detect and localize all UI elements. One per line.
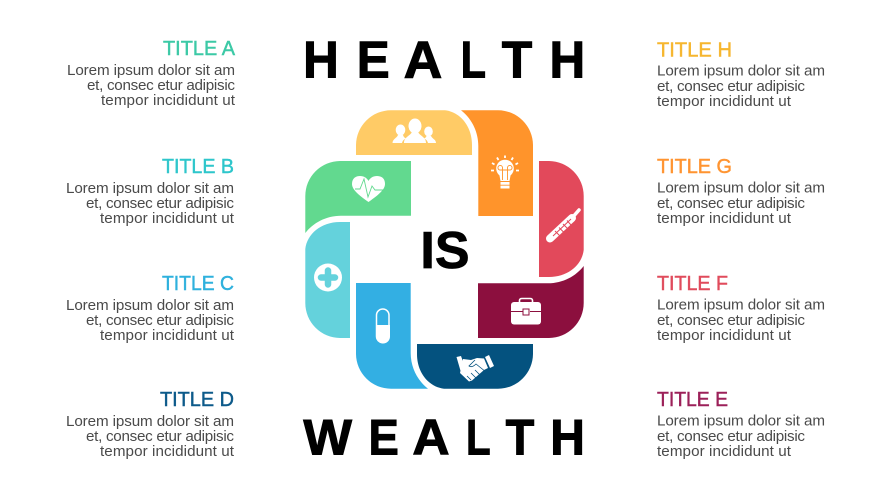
text block: Title A: tempor incididunt ut — [101, 92, 236, 109]
text block: Title E — [657, 388, 825, 460]
text block: Title E: et, consec etur adipisic — [657, 428, 805, 445]
heading: WEALTH: T — [506, 410, 535, 466]
heading: WEALTH: H — [550, 409, 585, 466]
text block: Title G: Lorem ipsum dolor sit am — [657, 180, 825, 196]
segment: green — [305, 161, 411, 233]
text block: Title G: et, consec etur adipisic — [657, 195, 805, 212]
segment: maroon — [478, 266, 584, 338]
segment: blue — [356, 283, 428, 389]
segment: yellow — [356, 110, 472, 155]
text block: Title D: et, consec etur adipisic — [86, 428, 234, 445]
text block: Title B: TITLE B — [162, 155, 234, 178]
icon: thermometer — [550, 210, 579, 238]
heading: WEALTH: E — [369, 410, 399, 466]
text block: Title C: tempor incididunt ut — [100, 327, 235, 344]
text block: Title B: et, consec etur adipisic — [86, 195, 234, 212]
text block: Title C: TITLE C — [162, 272, 234, 295]
text block: Title C: Lorem ipsum dolor sit am — [66, 297, 234, 314]
text block: Title A — [67, 37, 236, 109]
icon: capsule — [376, 309, 390, 344]
segment: dark blue — [417, 344, 533, 389]
text block: Title E: tempor incididunt ut — [657, 443, 792, 460]
segment: red — [539, 161, 584, 277]
text block: Title E: TITLE E — [657, 388, 728, 411]
text block: Title H: tempor incididunt ut — [657, 93, 792, 110]
text block: Title G: TITLE G — [657, 155, 732, 178]
center word: IS: IS — [420, 222, 470, 280]
heading: HEALTH: E — [357, 30, 390, 89]
text block: Title F — [657, 272, 825, 344]
text block: Title A: Lorem ipsum dolor sit am — [67, 62, 235, 79]
icon: handshake — [456, 355, 494, 382]
text block: Title B — [66, 155, 235, 227]
heading: WEALTH: W — [303, 409, 353, 465]
text block: Title F: TITLE F — [657, 272, 728, 295]
heading: WEALTH — [303, 409, 585, 466]
heading: HEALTH: A — [404, 31, 442, 89]
text block: Title D: tempor incididunt ut — [100, 443, 235, 460]
segment: teal — [305, 222, 350, 338]
text block: Title B: Lorem ipsum dolor sit am — [66, 180, 234, 197]
icon: medical plus — [314, 264, 342, 292]
heading: WEALTH: L — [466, 409, 491, 466]
icon: heart with pulse — [352, 176, 385, 202]
heading: HEALTH: L — [461, 30, 486, 89]
text block: Title A: et, consec etur adipisic — [87, 77, 235, 94]
heading: HEALTH: H — [303, 30, 339, 89]
heading: HEALTH — [303, 30, 585, 89]
text block: Title H: TITLE H — [657, 38, 732, 62]
segment: orange — [461, 110, 533, 216]
heading: HEALTH: H — [549, 30, 585, 89]
text block: Title D: TITLE D — [160, 388, 234, 411]
text block: Title F: Lorem ipsum dolor sit am — [657, 296, 825, 314]
text block: Title F: tempor incididunt ut — [657, 327, 792, 344]
icon: people — [392, 118, 436, 143]
text block: Title E: Lorem ipsum dolor sit am — [657, 412, 825, 430]
text block: Title A: TITLE A — [163, 37, 235, 60]
text block: Title G: tempor incididunt ut — [657, 210, 792, 227]
text block: Title H: Lorem ipsum dolor sit am — [657, 62, 825, 80]
text block: Title F: et, consec etur adipisic — [657, 312, 805, 329]
text block: Title G — [657, 155, 825, 227]
icon: briefcase — [511, 298, 541, 324]
text block: Title C: et, consec etur adipisic — [86, 312, 234, 329]
heading: HEALTH: T — [502, 31, 532, 89]
text block: Title D: Lorem ipsum dolor sit am — [66, 413, 234, 430]
heading: WEALTH: A — [412, 409, 450, 465]
text block: Title D — [66, 388, 235, 460]
text block: Title B: tempor incididunt ut — [100, 210, 235, 227]
text block: Title H — [657, 38, 825, 110]
text block: Title C — [66, 272, 235, 344]
icon: light bulb — [491, 156, 519, 188]
text block: Title H: et, consec etur adipisic — [657, 78, 805, 95]
